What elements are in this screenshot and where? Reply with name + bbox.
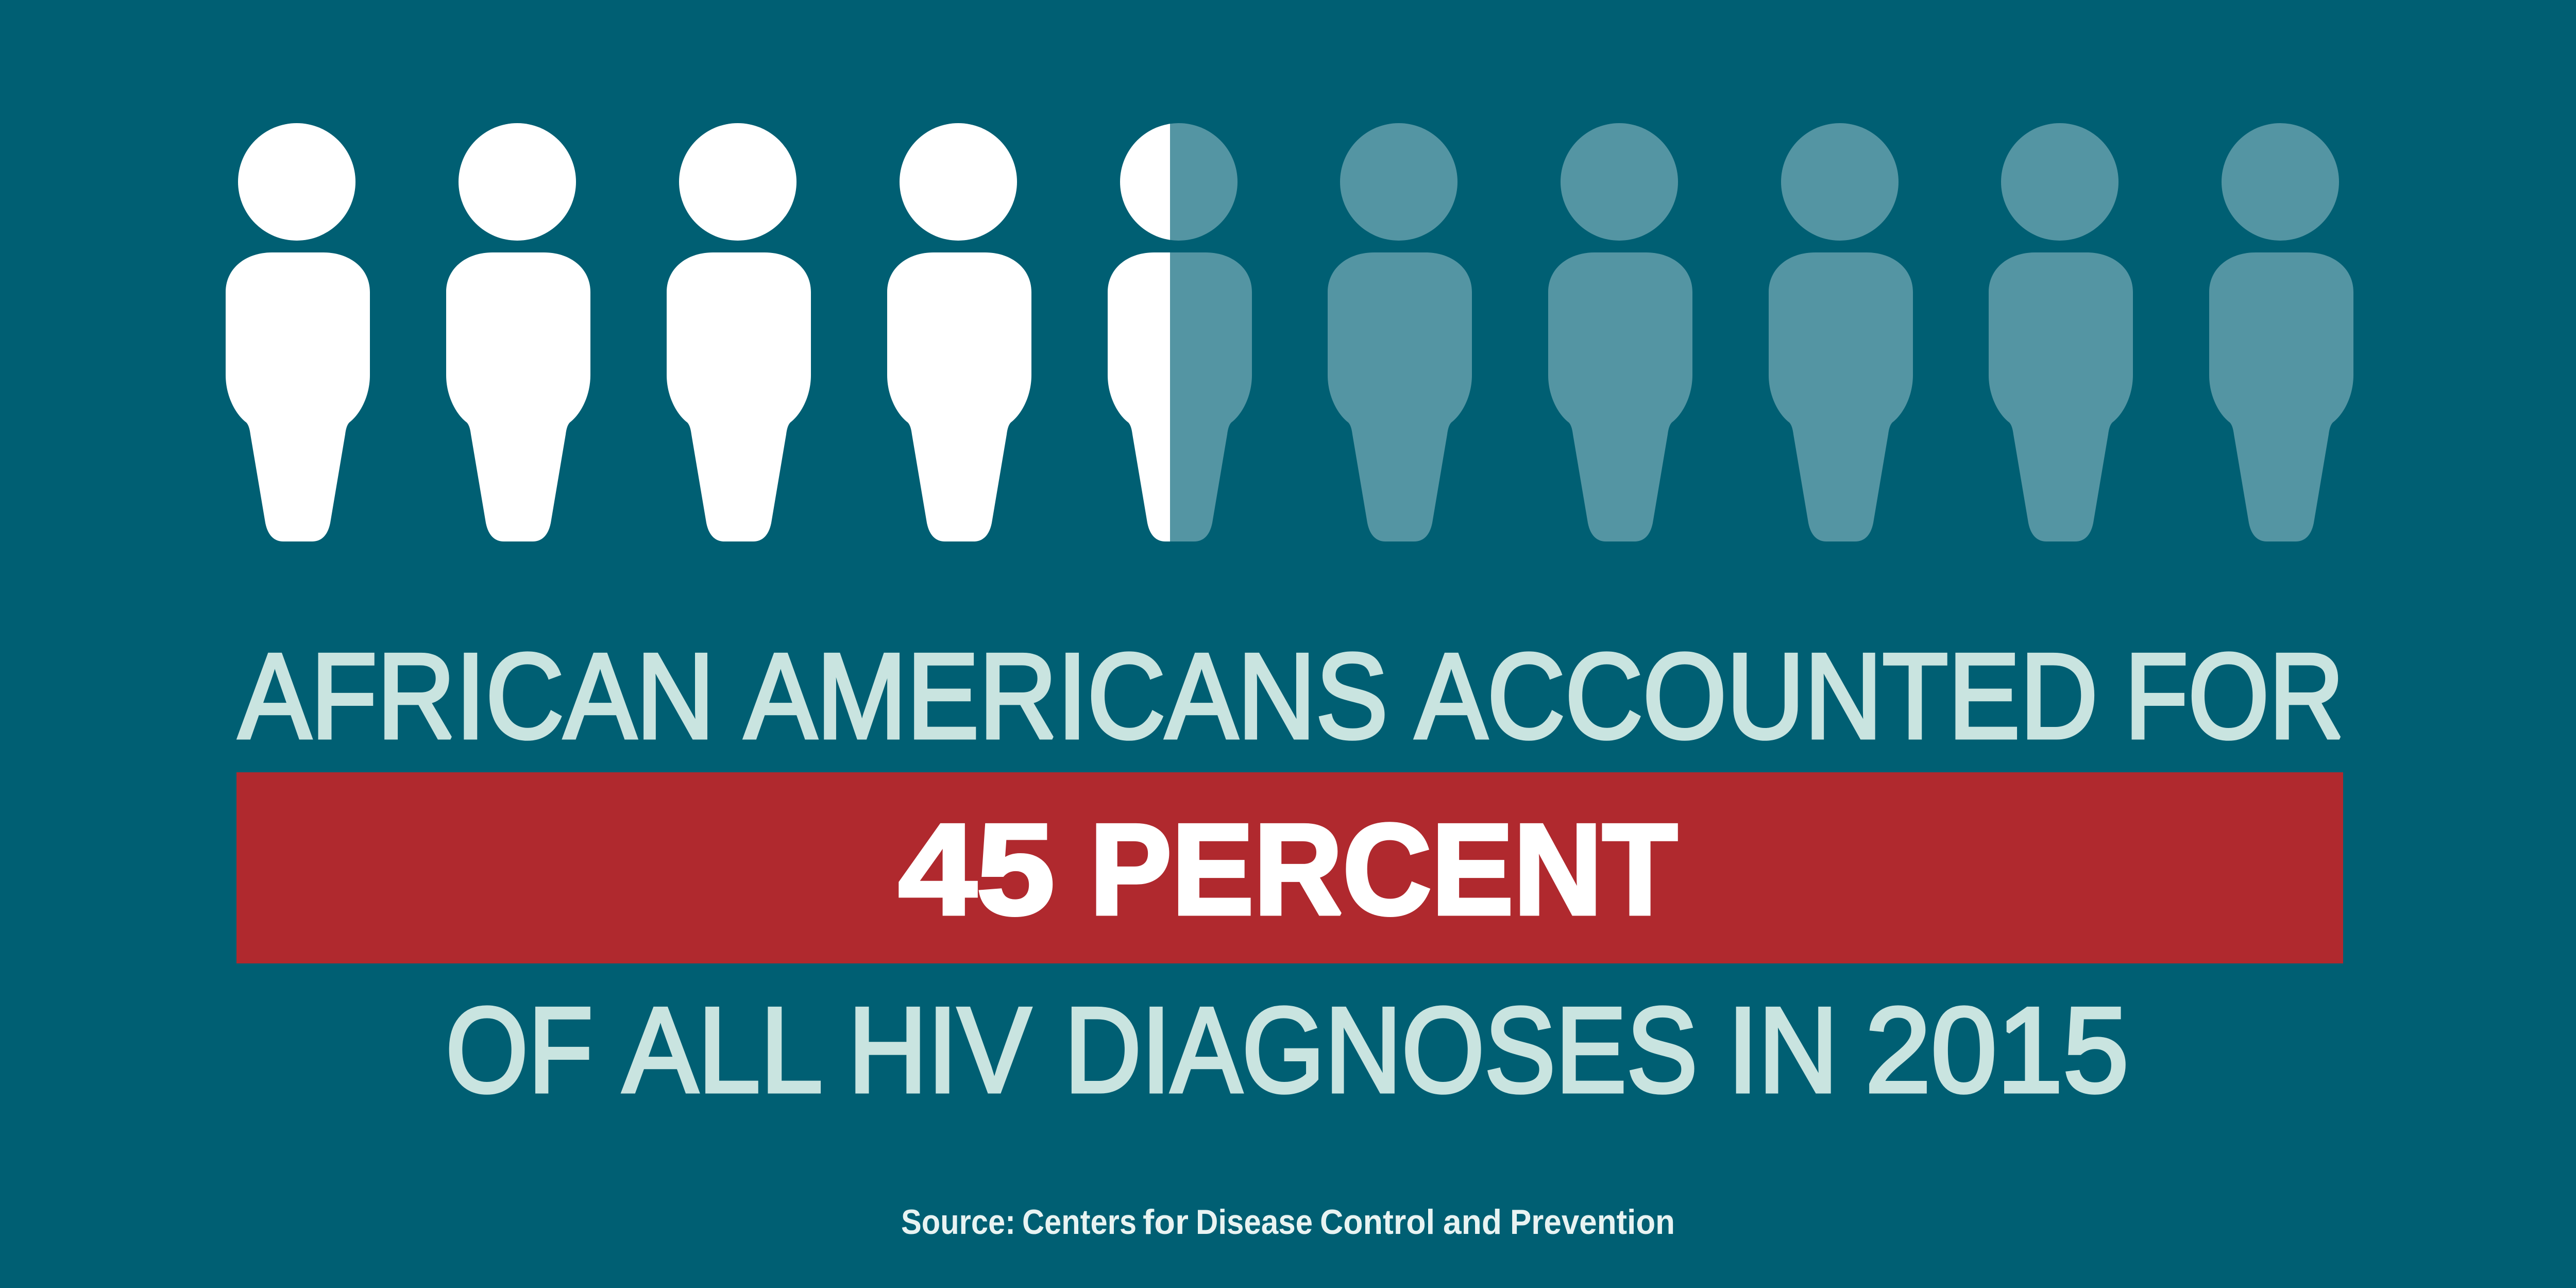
source line: Centers (1022, 1202, 1137, 1242)
person 10: muted (2209, 123, 2353, 541)
banner text: 45 percent: PERCENT (1090, 798, 1677, 942)
heading line 1: AFRICAN (239, 628, 715, 764)
source line: Disease (1196, 1202, 1313, 1242)
heading line 1: ACCOUNTED (1415, 628, 2098, 764)
heading line 1: FOR (2125, 628, 2344, 764)
person 1: highlighted (226, 123, 370, 541)
heading line 2: ALL (623, 982, 823, 1117)
infographic canvas (226, 123, 2353, 1234)
source line: and (1443, 1202, 1502, 1242)
heading line 2 (446, 982, 2129, 1117)
person 5: half highlighted (1108, 123, 1252, 541)
source line: Source: (901, 1202, 1015, 1242)
pictogram: ten people, 4.5 highlighted (226, 123, 2353, 541)
heading line 1 (239, 628, 2344, 764)
source line: Control (1320, 1202, 1435, 1242)
person 2: highlighted (446, 123, 590, 541)
heading line 1: AMERICANS (744, 628, 1388, 764)
heading line 2: 2015 (1865, 982, 2129, 1117)
red banner (236, 772, 2343, 963)
source line: for (1143, 1202, 1189, 1242)
source line: Prevention (1510, 1202, 1675, 1242)
person 8: muted (1769, 123, 1913, 541)
person 6: muted (1328, 123, 1472, 541)
banner text: 45 percent: 45 (899, 798, 1055, 942)
person 9: muted (1989, 123, 2133, 541)
heading line 2: IN (1727, 982, 1838, 1117)
source line (901, 1202, 1675, 1242)
heading line 2: OF (446, 982, 593, 1117)
heading line 2: DIAGNOSES (1064, 982, 1698, 1117)
person 4: highlighted (887, 123, 1031, 541)
person 3: highlighted (667, 123, 811, 541)
person 7: muted (1548, 123, 1692, 541)
heading line 2: HIV (848, 982, 1031, 1117)
